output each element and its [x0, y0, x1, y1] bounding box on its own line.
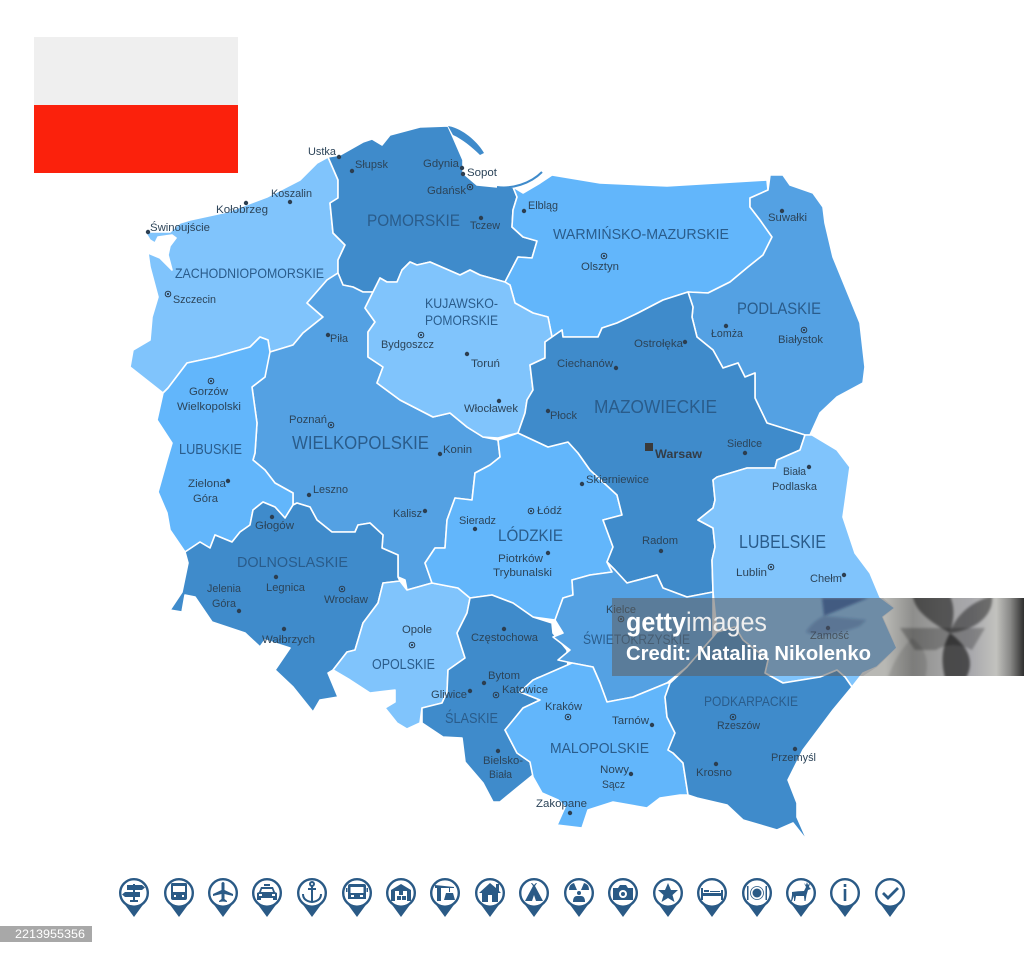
- region: Lubelskie: [698, 435, 897, 687]
- icon: warehouse: [387, 879, 415, 917]
- city: Kolobrzeg: Kołobrzeg: [216, 204, 268, 216]
- city: Glogow: [255, 515, 294, 532]
- icon: anchor: [298, 879, 326, 917]
- city: Torun: Toruń: [471, 358, 500, 370]
- watermark text: gettyimages: [626, 607, 767, 637]
- city: Bialystok: [778, 327, 823, 346]
- city: Biala Podlaska: Podlaska: [772, 481, 818, 493]
- icon: deer: [787, 879, 815, 917]
- map of Poland regions: [130, 126, 897, 842]
- city: Bielsko-Biala: Biała: [489, 769, 513, 781]
- region: Zachodniopomorskie: [130, 157, 345, 393]
- city: Rzeszow: Rzeszów: [717, 720, 760, 732]
- region: Opolskie: [333, 581, 470, 729]
- city: Piotrkow Trybunalski: Trybunalski: [493, 567, 552, 579]
- icon: bus: [343, 879, 371, 917]
- city: Krosno: [696, 762, 732, 779]
- city: Krosno: Krosno: [696, 767, 732, 779]
- label: Kujawsko-Pomorskie: [425, 295, 498, 328]
- city: Opole: Opole: [402, 624, 432, 636]
- city: Walbrzych: [262, 627, 315, 646]
- city: Radom: [642, 535, 678, 553]
- city: Zakopane: Zakopane: [536, 798, 587, 810]
- city: Slupsk: Słupsk: [355, 159, 388, 171]
- city: Ciechanow: Ciechanów: [557, 358, 613, 370]
- city: Tarnow: Tarnów: [612, 715, 649, 727]
- icon: plate and cutlery: [743, 879, 771, 917]
- city: Kielce: [606, 604, 636, 622]
- label: Wielkopolskie: WIELKOPOLSKIE: [292, 433, 429, 453]
- city: Piotrkow Trybunalski: [493, 551, 552, 579]
- label: Lubelskie: LUBELSKIE: [739, 532, 826, 552]
- icon: star: [654, 879, 682, 917]
- city: Krakow: [545, 701, 582, 720]
- icon: train: [165, 879, 193, 917]
- label: Podkarpackie: PODKARPACKIE: [704, 693, 798, 709]
- city: Bielsko-Biala: Bielsko-: [483, 755, 523, 767]
- city: Katowice: Katowice: [502, 684, 548, 696]
- flag of Poland: [34, 37, 238, 173]
- icon: crane: [431, 879, 459, 917]
- city: Lodz: Łódź: [537, 505, 562, 517]
- region: Swietokrzyskie: [553, 562, 713, 702]
- label: Zachodniopomorskie: ZACHODNIOPOMORSKIE: [175, 265, 324, 281]
- city: Poznan: Poznań: [289, 414, 327, 426]
- city: Olsztyn: Olsztyn: [581, 261, 619, 273]
- label: Kujawsko-Pomorskie: POMORSKIE: [425, 312, 498, 328]
- city: Wloclawek: Włocławek: [464, 403, 519, 415]
- city: Nowy Sacz: Sącz: [602, 779, 625, 791]
- city: Jelenia Gora: [207, 583, 242, 613]
- city: Lublin: Lublin: [736, 567, 767, 579]
- city: Zakopane: [536, 798, 587, 815]
- city: Gdansk: Gdańsk: [427, 185, 467, 197]
- region: Kujawsko-Pomorskie: [365, 262, 552, 438]
- icon: information: [831, 879, 859, 917]
- city: Kielce: Kielce: [606, 604, 636, 616]
- city: Leszno: Leszno: [313, 484, 348, 496]
- city: Lublin: [736, 564, 774, 579]
- region: Wielkopolskie: [252, 273, 500, 590]
- icon: checkmark: [876, 879, 904, 917]
- image id tag: [0, 926, 92, 942]
- label: Warminsko-Mazurskie: WARMIŃSKO-MAZURSKIE: [553, 226, 729, 243]
- label: Lubuskie: LUBUSKIE: [179, 441, 242, 458]
- city: Torun: [465, 352, 500, 370]
- region labels: [175, 212, 826, 757]
- icon: camera: [609, 879, 637, 917]
- city: Radom: Radom: [642, 535, 678, 547]
- label: Lodzkie: LÓDZKIE: [498, 526, 563, 545]
- region: Warminsko-Mazurskie: [505, 175, 772, 337]
- region: Podlaskie: [688, 175, 865, 435]
- city: Nowy Sacz: Nowy: [600, 764, 630, 776]
- image id tag: 2213955356: [15, 927, 85, 941]
- city: Przemysl: [771, 747, 816, 764]
- icon: airplane: [209, 879, 237, 917]
- city: Biala Podlaska: Biała: [783, 466, 807, 478]
- label: Mazowieckie: MAZOWIECKIE: [594, 397, 717, 417]
- icon: radiation: [565, 879, 593, 917]
- city: Gliwice: Gliwice: [431, 689, 467, 701]
- region: Podkarpackie: [665, 627, 852, 842]
- city: Piotrkow Trybunalski: Piotrków: [498, 553, 543, 565]
- city: Plock: Płock: [550, 410, 577, 422]
- region: Slaskie: [422, 595, 568, 802]
- city: Wroclaw: [324, 586, 368, 606]
- city: Bytom: [482, 670, 520, 685]
- icon: tent: [520, 879, 548, 917]
- label: Slaskie: ŚLASKIE: [445, 709, 498, 727]
- icon row: [120, 879, 904, 917]
- city: Gorzow Wielkopolski: Gorzów: [189, 386, 228, 398]
- city: Kalisz: Kalisz: [393, 508, 422, 520]
- city: Czestochowa: [471, 627, 539, 644]
- city: Ustka: Ustka: [308, 146, 337, 158]
- label: Malopolskie: MALOPOLSKIE: [550, 740, 649, 757]
- city: Skierniewice: Skierniewice: [586, 474, 649, 486]
- label: Kujawsko-Pomorskie: KUJAWSKO-: [425, 295, 498, 311]
- city: Sieradz: Sieradz: [459, 515, 496, 527]
- city: Legnica: [266, 575, 306, 594]
- city: Rzeszow: [717, 714, 760, 732]
- label: Dolnoslaskie: DOLNOSLASKIE: [237, 554, 348, 571]
- city: Bydgoszcz: Bydgoszcz: [381, 339, 434, 351]
- region: Malopolskie: [505, 663, 688, 828]
- city: Tczew: Tczew: [470, 220, 500, 232]
- city: Opole: [402, 624, 432, 648]
- label: Swietokrzyskie: ŚWIETOKRZYSKIE: [583, 630, 690, 647]
- capital: Warsaw: Warsaw: [655, 447, 703, 461]
- city: Zielona Gora: Góra: [193, 493, 219, 505]
- city: Szczecin: Szczecin: [173, 294, 216, 306]
- city: Biala Podlaska: [772, 465, 818, 493]
- city: Bytom: Bytom: [488, 670, 520, 682]
- region: Dolnoslaskie: [170, 502, 400, 712]
- city: Ostroleka: Ostrołęka: [634, 338, 684, 350]
- city: Gorzow Wielkopolski: [177, 378, 241, 413]
- region: Pomorskie: [328, 126, 537, 292]
- city: Siedlce: Siedlce: [727, 438, 762, 450]
- city: Konin: Konin: [443, 444, 472, 456]
- city: Zielona Gora: Zielona: [188, 478, 227, 490]
- city: Wroclaw: Wrocław: [324, 594, 368, 606]
- city: Legnica: Legnica: [266, 582, 306, 594]
- city: Walbrzych: Wałbrzych: [262, 634, 315, 646]
- city: Krakow: Kraków: [545, 701, 582, 713]
- city: Glogow: Głogów: [255, 520, 294, 532]
- city: Gdynia: Gdynia: [423, 158, 460, 170]
- Vistula spit: [497, 172, 542, 187]
- city: Zielona Gora: [188, 478, 230, 505]
- city: Czestochowa: Częstochowa: [471, 632, 539, 644]
- Hel peninsula: [448, 126, 484, 155]
- city: Jelenia Gora: Góra: [212, 598, 237, 610]
- city: Bialystok: Białystok: [778, 334, 823, 346]
- city: Lomza: Łomża: [711, 328, 744, 340]
- city: Jelenia Gora: Jelenia: [207, 583, 242, 595]
- city: Gorzow Wielkopolski: Wielkopolski: [177, 401, 241, 413]
- city: Nowy Sacz: [600, 764, 633, 791]
- watermark band: [612, 596, 1024, 678]
- icon: taxi: [253, 879, 281, 917]
- city: Zamosc: Zamość: [810, 630, 849, 642]
- city: Chelm: Chełm: [810, 573, 842, 585]
- icon: house: [476, 879, 504, 917]
- icon: bed: [698, 879, 726, 917]
- label: Opolskie: OPOLSKIE: [372, 656, 435, 673]
- city: Elblag: Elbląg: [528, 200, 558, 212]
- city: Sopot: Sopot: [467, 167, 497, 179]
- region: Lubuskie: [157, 337, 293, 552]
- city: Pila: Piła: [330, 333, 349, 345]
- city: Olsztyn: [581, 253, 619, 273]
- city: Bydgoszcz: [381, 332, 434, 351]
- city: Bielsko-Biala: [483, 749, 523, 781]
- city labels and markers: [146, 146, 849, 815]
- city: Szczecin: [165, 291, 216, 306]
- label: Podlaskie: PODLASKIE: [737, 300, 821, 318]
- city: Suwalki: Suwałki: [768, 212, 807, 224]
- city: Koszalin: Koszalin: [271, 188, 312, 200]
- city: Przemysl: Przemyśl: [771, 752, 816, 764]
- region: Lodzkie: [425, 433, 622, 620]
- icon: signpost: [120, 879, 148, 917]
- capital: Warsaw: [645, 443, 703, 461]
- region: Mazowieckie: [518, 292, 805, 597]
- city: Siedlce: [727, 438, 762, 455]
- label: Pomorskie: POMORSKIE: [367, 212, 460, 230]
- city: Swinoujscie: Świnoujście: [150, 221, 210, 234]
- credit text: Credit: Nataliia Nikolenko: [626, 643, 871, 665]
